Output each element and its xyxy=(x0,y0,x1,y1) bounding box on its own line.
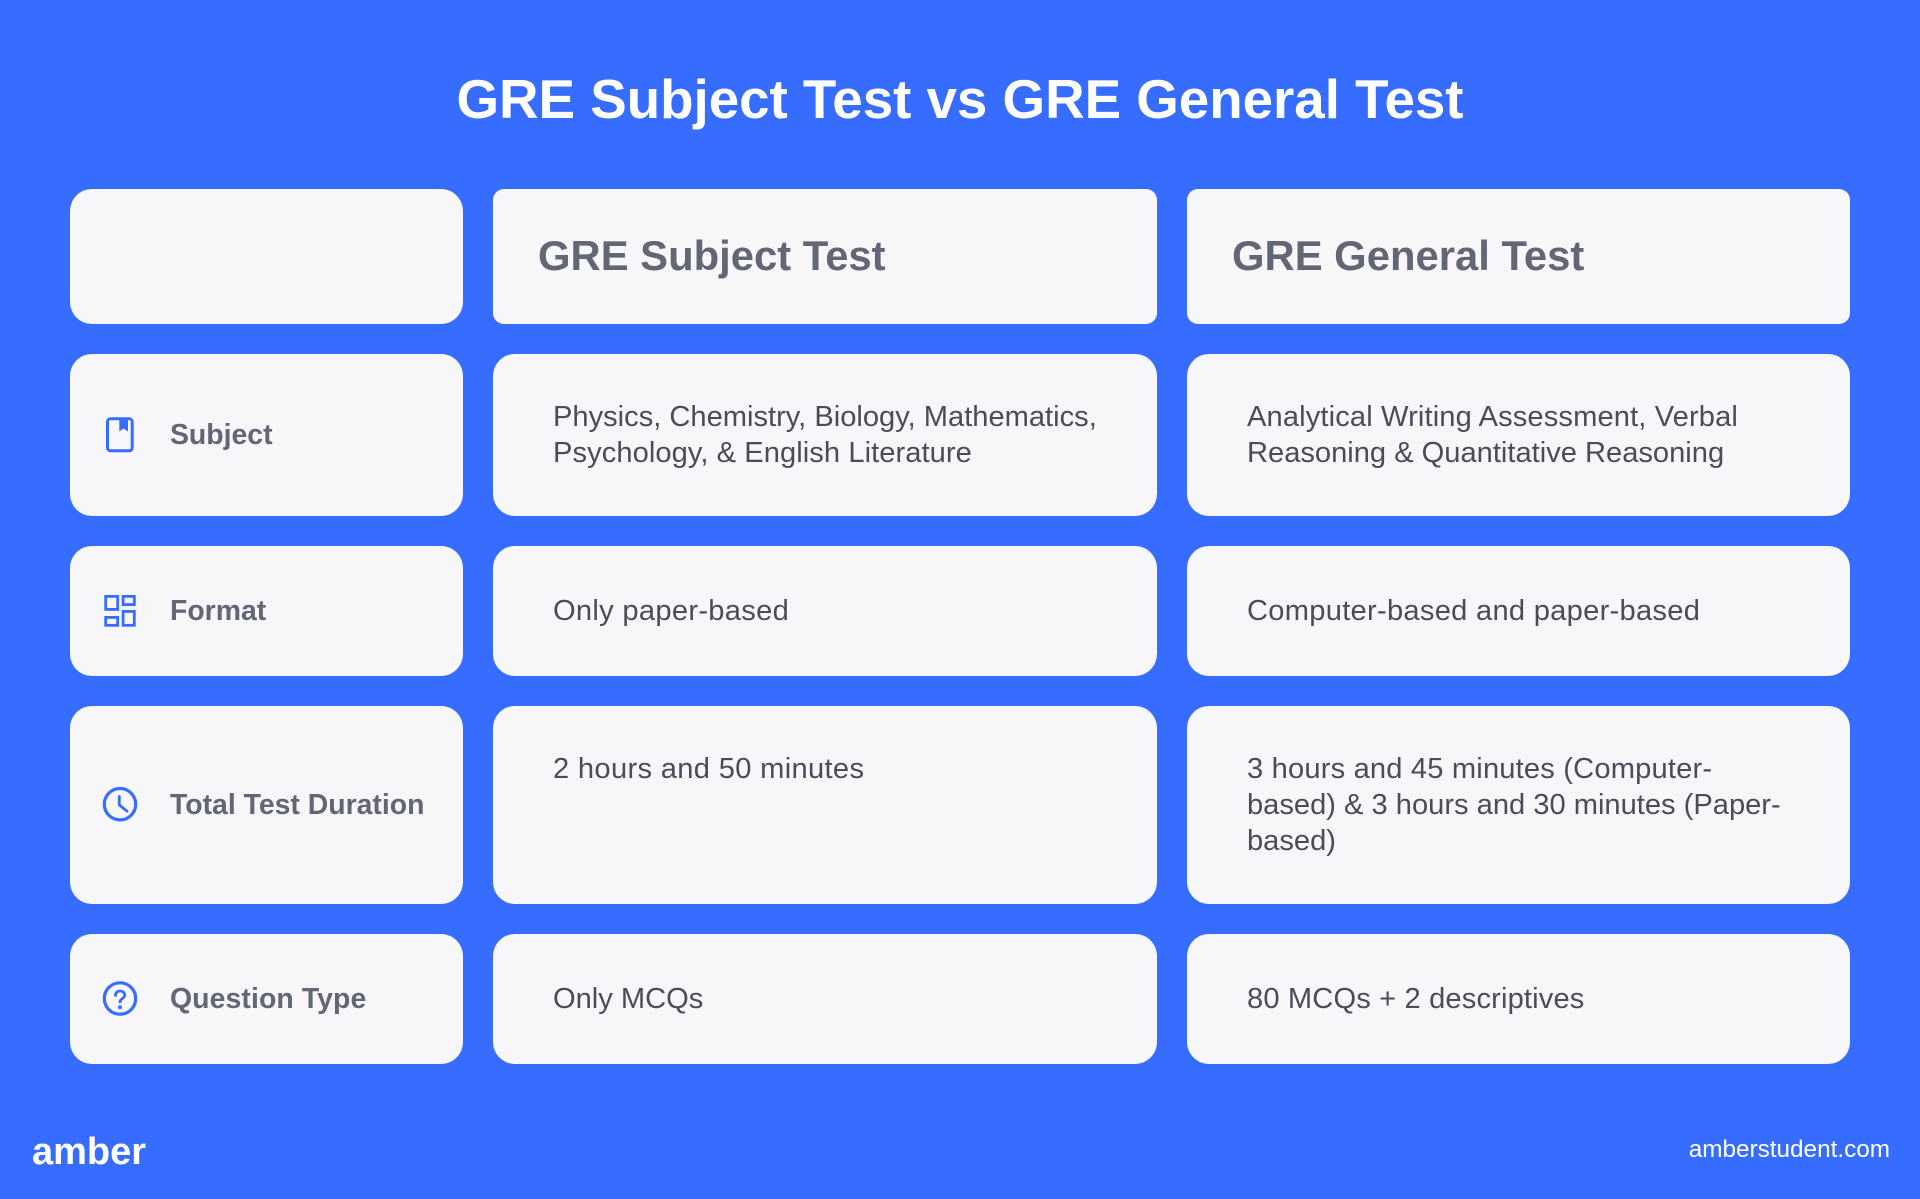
panel: Question Type - General Test: 80 MCQs + 2 descriptives xyxy=(1247,983,1584,1015)
panel: Question Type label xyxy=(70,934,463,1064)
panel: Subject label xyxy=(70,354,463,516)
panel: Duration - General Test: based) xyxy=(1247,825,1336,857)
panel: Format - General Test xyxy=(1187,546,1850,676)
panel: empty header cell xyxy=(70,189,463,324)
panel: Subject - Subject Test xyxy=(493,354,1157,516)
panel: Subject - General Test xyxy=(1187,354,1850,516)
panel: Duration - General Test: 3 hours and 45 minutes (Computer- xyxy=(1247,753,1712,785)
panel: Question Type - Subject Test: Only MCQs xyxy=(553,983,703,1015)
title: GRE Subject Test vs GRE General Test xyxy=(457,68,1463,130)
panel: Duration - Subject Test xyxy=(493,706,1157,904)
panel: Format label xyxy=(70,546,463,676)
panel: Format - General Test: Computer-based and paper-based xyxy=(1247,595,1700,627)
panel: Subject - General Test: Analytical Writing Assessment, Verbal xyxy=(1247,401,1738,433)
panel: GRE General Test header: GRE General Test xyxy=(1232,232,1584,279)
panel: Question Type label: Question Type xyxy=(170,983,366,1015)
icon: dashboard grid xyxy=(104,595,136,627)
panel: Format - Subject Test: Only paper-based xyxy=(553,595,789,627)
panel: Total Test Duration label xyxy=(70,706,463,904)
panel: Total Test Duration label: Total Test Duration xyxy=(170,789,424,821)
panel: Subject - General Test: Reasoning & Quantitative Reasoning xyxy=(1247,437,1724,469)
panel: Subject label: Subject xyxy=(170,419,273,451)
panel: Duration - General Test: based) & 3 hours and 30 minutes (Paper- xyxy=(1247,789,1781,821)
panel: GRE Subject Test header: GRE Subject Test xyxy=(538,232,886,279)
panel: GRE Subject Test header xyxy=(493,189,1157,324)
panel: Format label: Format xyxy=(170,595,266,627)
icon: bookmark book xyxy=(106,417,134,452)
panel: Duration - General Test xyxy=(1187,706,1850,904)
panel: Subject - Subject Test: Psychology, & English Literature xyxy=(553,437,972,469)
icon: question mark circle xyxy=(102,981,138,1016)
logo: amber: amber xyxy=(32,1131,146,1173)
panel: Subject - Subject Test: Physics, Chemistry, Biology, Mathematics, xyxy=(553,401,1097,433)
panel: Question Type - Subject Test xyxy=(493,934,1157,1064)
panel: GRE General Test header xyxy=(1187,189,1850,324)
footer URL: amberstudent.com xyxy=(1689,1136,1890,1163)
panel: Duration - Subject Test: 2 hours and 50 minutes xyxy=(553,753,864,785)
panel: Format - Subject Test xyxy=(493,546,1157,676)
icon: clock xyxy=(102,786,138,822)
panel: Question Type - General Test xyxy=(1187,934,1850,1064)
